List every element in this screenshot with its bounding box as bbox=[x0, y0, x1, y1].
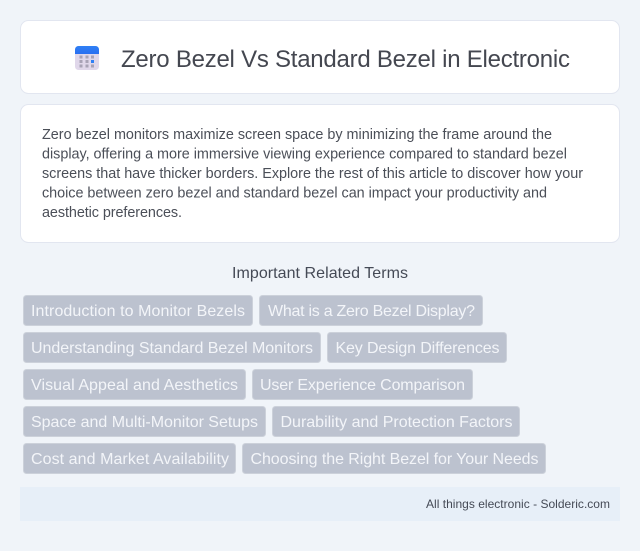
tag bbox=[24, 370, 246, 400]
footer bbox=[20, 487, 620, 521]
tag: Understanding Standard Bezel Monitors bbox=[31, 340, 313, 357]
tag: Introduction to Monitor Bezels bbox=[31, 303, 245, 320]
tag: Space and Multi-Monitor Setups bbox=[31, 414, 258, 431]
tag: Choosing the Right Bezel for Your Needs bbox=[250, 451, 538, 468]
tag bbox=[272, 406, 520, 436]
title: Zero Bezel Vs Standard Bezel in Electronic bbox=[121, 46, 570, 73]
text block: description: screens that have thicker borders. Explore the rest of this article to discover how your bbox=[42, 166, 583, 182]
tag bbox=[252, 370, 472, 400]
panel: header bbox=[20, 20, 620, 94]
footer: All things electronic - Solderic.com bbox=[426, 497, 610, 511]
tag: Cost and Market Availability bbox=[31, 451, 229, 468]
tag: Visual Appeal and Aesthetics bbox=[31, 377, 238, 394]
tag bbox=[24, 444, 236, 474]
tag bbox=[242, 444, 546, 474]
text block: description: display, offering a more immersive viewing experience compared to standard bezel bbox=[42, 146, 567, 162]
tag bbox=[24, 332, 320, 362]
tag: Key Design Differences bbox=[336, 340, 500, 357]
tag bbox=[328, 332, 506, 362]
tag: What is a Zero Bezel Display? bbox=[268, 303, 475, 320]
icon: calendar bbox=[75, 46, 99, 70]
tag bbox=[24, 406, 266, 436]
tag: User Experience Comparison bbox=[260, 377, 465, 394]
tag: Durability and Protection Factors bbox=[280, 414, 512, 431]
text block: description bbox=[42, 127, 583, 221]
text block: description: choice between zero bezel and standard bezel can impact your productivity and bbox=[42, 186, 547, 202]
tag bbox=[260, 296, 482, 326]
text block: description: aesthetic preferences. bbox=[42, 205, 182, 221]
tags: related terms bbox=[24, 296, 546, 474]
panel: description bbox=[20, 104, 620, 242]
heading: related terms: Important Related Terms bbox=[232, 265, 408, 282]
tag bbox=[24, 296, 252, 326]
text block: description: Zero bezel monitors maximize screen space by minimizing the frame around the bbox=[42, 127, 552, 143]
